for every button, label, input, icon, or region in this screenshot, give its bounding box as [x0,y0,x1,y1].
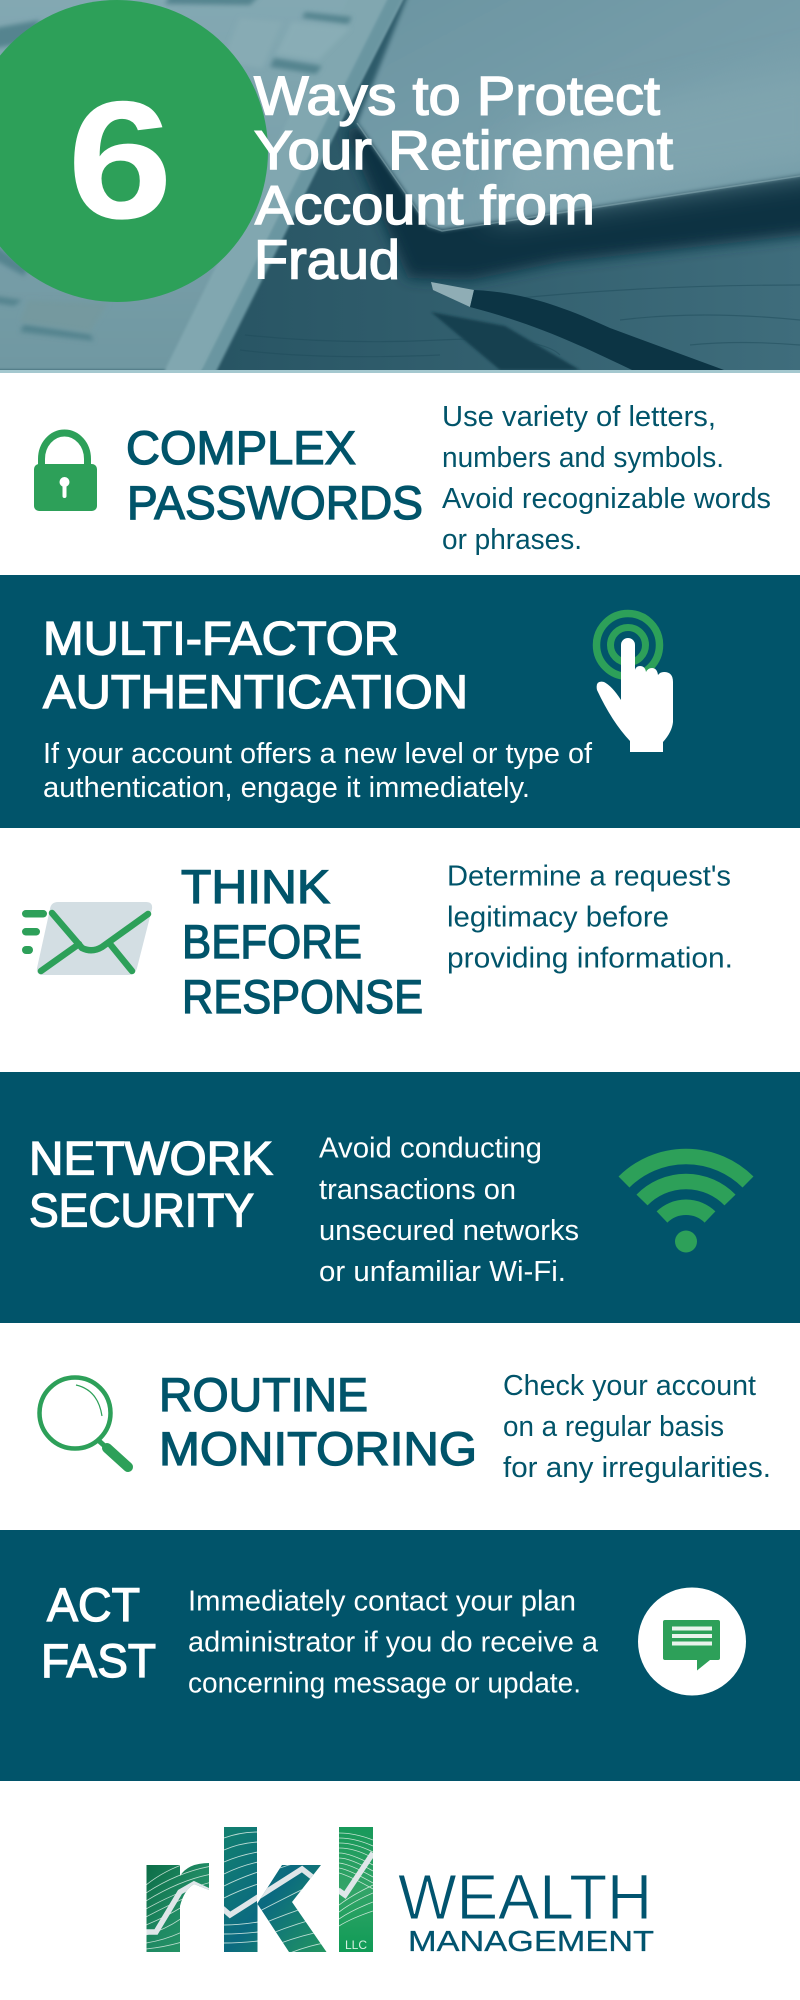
text block: or phrases. [442,524,582,556]
keys [282,27,338,58]
keyboard body [0,0,413,370]
text block: Avoid conducting [319,1133,542,1165]
heading: ACT [47,1578,140,1631]
phone [357,0,800,230]
text block [503,1370,771,1484]
icon: speech bubble in white circle [638,1588,746,1696]
text block: Check your account [503,1370,756,1402]
text block: Use variety of letters, [442,401,716,433]
logo: RKL Wealth Management [146,1825,654,1958]
text block: Avoid recognizable words [442,483,771,515]
heading: AUTHENTICATION [43,665,468,718]
heading [43,612,468,718]
text block: legitimacy before [447,902,669,934]
logo wordmark: WEALTH [398,1861,652,1933]
heading: PASSWORDS [127,476,423,529]
panel: hero header with photo and title [0,0,800,380]
background photo: keyboard, phone and pen [0,0,800,380]
logo mark: rkl letters: LLC [345,1938,367,1952]
panel: routine monitoring [0,1323,800,1530]
title [254,64,673,290]
text block: for any irregularities. [503,1452,771,1484]
icon: speeding envelope [22,902,152,975]
pen shadow [431,312,580,370]
heading: COMPLEX [126,421,356,474]
icon: hand tapping target [596,614,673,752]
icon: wi-fi [624,1156,748,1252]
logo wordmark: MANAGEMENT [408,1926,654,1958]
text block: administrator if you do receive a [188,1627,599,1659]
text block: If your account offers a new level or type of [43,738,593,770]
heading: THINK [181,860,330,913]
text block [442,401,771,556]
text block: authentication, engage it immediately. [43,772,530,804]
title: Fraud [254,228,400,290]
text block [188,1586,599,1700]
heading: SECURITY [29,1184,254,1236]
text block: transactions on [319,1174,516,1206]
heading [126,421,423,529]
text block: Determine a request's [447,861,731,893]
title: Ways to Protect [254,64,660,126]
heading [41,1578,156,1687]
pen [431,282,724,370]
panel: complex passwords [0,373,800,575]
text block: numbers and symbols. [442,442,724,474]
title: Account from [255,174,595,236]
icon: magnifying glass [40,1378,128,1467]
text block: Immediately contact your plan [188,1586,576,1618]
icon: padlock [34,433,97,511]
text block: or unfamiliar Wi-Fi. [319,1256,566,1288]
text block [43,738,593,804]
panel: network security [0,1072,800,1323]
heading: MULTI-FACTOR [43,612,399,664]
text block: on a regular basis [503,1411,724,1443]
heading: BEFORE [182,915,362,968]
logo mark: rkl letters [146,1825,373,1955]
text block: providing information. [447,943,733,975]
text block [447,861,733,975]
title: Your Retirement [254,119,673,181]
heading [29,1132,273,1236]
key shadows [0,0,352,341]
circle badge with number 6: 6 [67,66,173,254]
panel: think before response [0,828,800,1072]
heading: FAST [41,1634,156,1687]
table shadow under phone [345,120,800,280]
heading: RESPONSE [182,970,423,1023]
heading: ROUTINE [159,1368,368,1421]
text block: concerning message or update. [188,1668,581,1700]
panel: act fast [0,1530,800,1781]
light base rule [0,370,800,373]
heading: NETWORK [29,1132,273,1184]
panel: multi-factor authentication [0,575,800,828]
wood grain [382,284,800,357]
circle badge with number 6 [0,0,268,302]
heading [159,1368,477,1475]
text block [319,1133,579,1288]
heading: MONITORING [159,1422,477,1475]
heading [181,860,423,1023]
text block: unsecured networks [319,1215,579,1247]
